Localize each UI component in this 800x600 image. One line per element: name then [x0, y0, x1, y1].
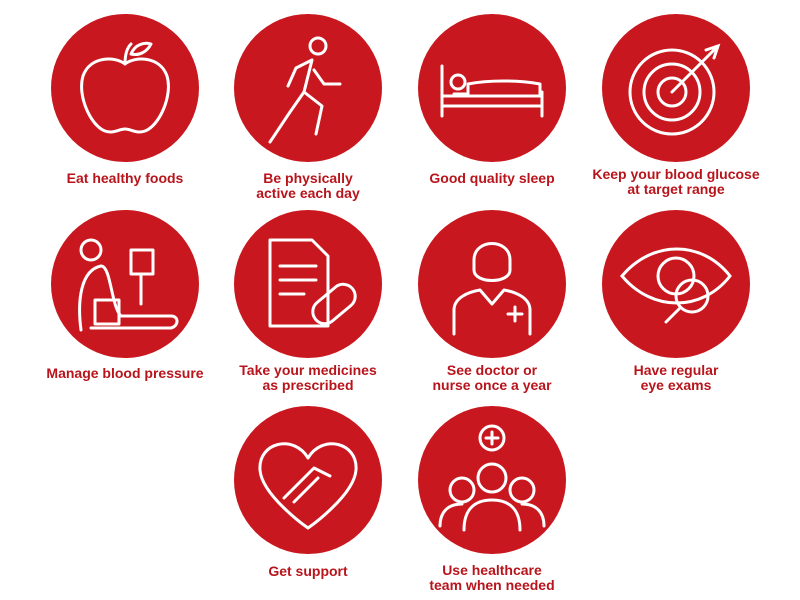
label: eye exams	[634, 362, 718, 393]
circle: support	[234, 406, 382, 554]
label: support: Get support	[268, 563, 348, 579]
circle: blood pressure	[51, 210, 199, 358]
label: physically active: Be physically	[263, 170, 353, 186]
label: doctor	[432, 362, 552, 393]
circle: physically active	[234, 14, 382, 162]
label: glucose	[592, 166, 760, 197]
label: glucose: at target range	[627, 181, 725, 197]
label: doctor: nurse once a year	[432, 377, 552, 393]
circle: healthcare team	[418, 406, 566, 554]
label: healthcare team	[429, 562, 555, 593]
label: medicines: as prescribed	[262, 377, 354, 393]
label: physically active: active each day	[256, 185, 360, 201]
label: sleep: Good quality sleep	[429, 170, 555, 186]
circle: doctor	[418, 210, 566, 358]
label: eat healthy foods: Eat healthy foods	[67, 170, 183, 186]
circle: glucose target	[602, 14, 750, 162]
label: doctor: See doctor or	[447, 362, 537, 378]
circle: sleep	[418, 14, 566, 162]
label: eye exams: Have regular	[634, 362, 718, 378]
label: medicines: Take your medicines	[239, 362, 377, 378]
label: physically active	[256, 170, 360, 201]
label: healthcare team: team when needed	[429, 577, 555, 593]
circle: medicines	[234, 210, 382, 358]
circle: eye exams	[602, 210, 750, 358]
label: healthcare team: Use healthcare	[442, 562, 542, 578]
circle: eat healthy foods	[51, 14, 199, 162]
label: blood pressure: Manage blood pressure	[46, 365, 204, 381]
label: glucose: Keep your blood glucose	[592, 166, 760, 182]
label: medicines	[239, 362, 377, 393]
label: eye exams: eye exams	[641, 377, 711, 393]
